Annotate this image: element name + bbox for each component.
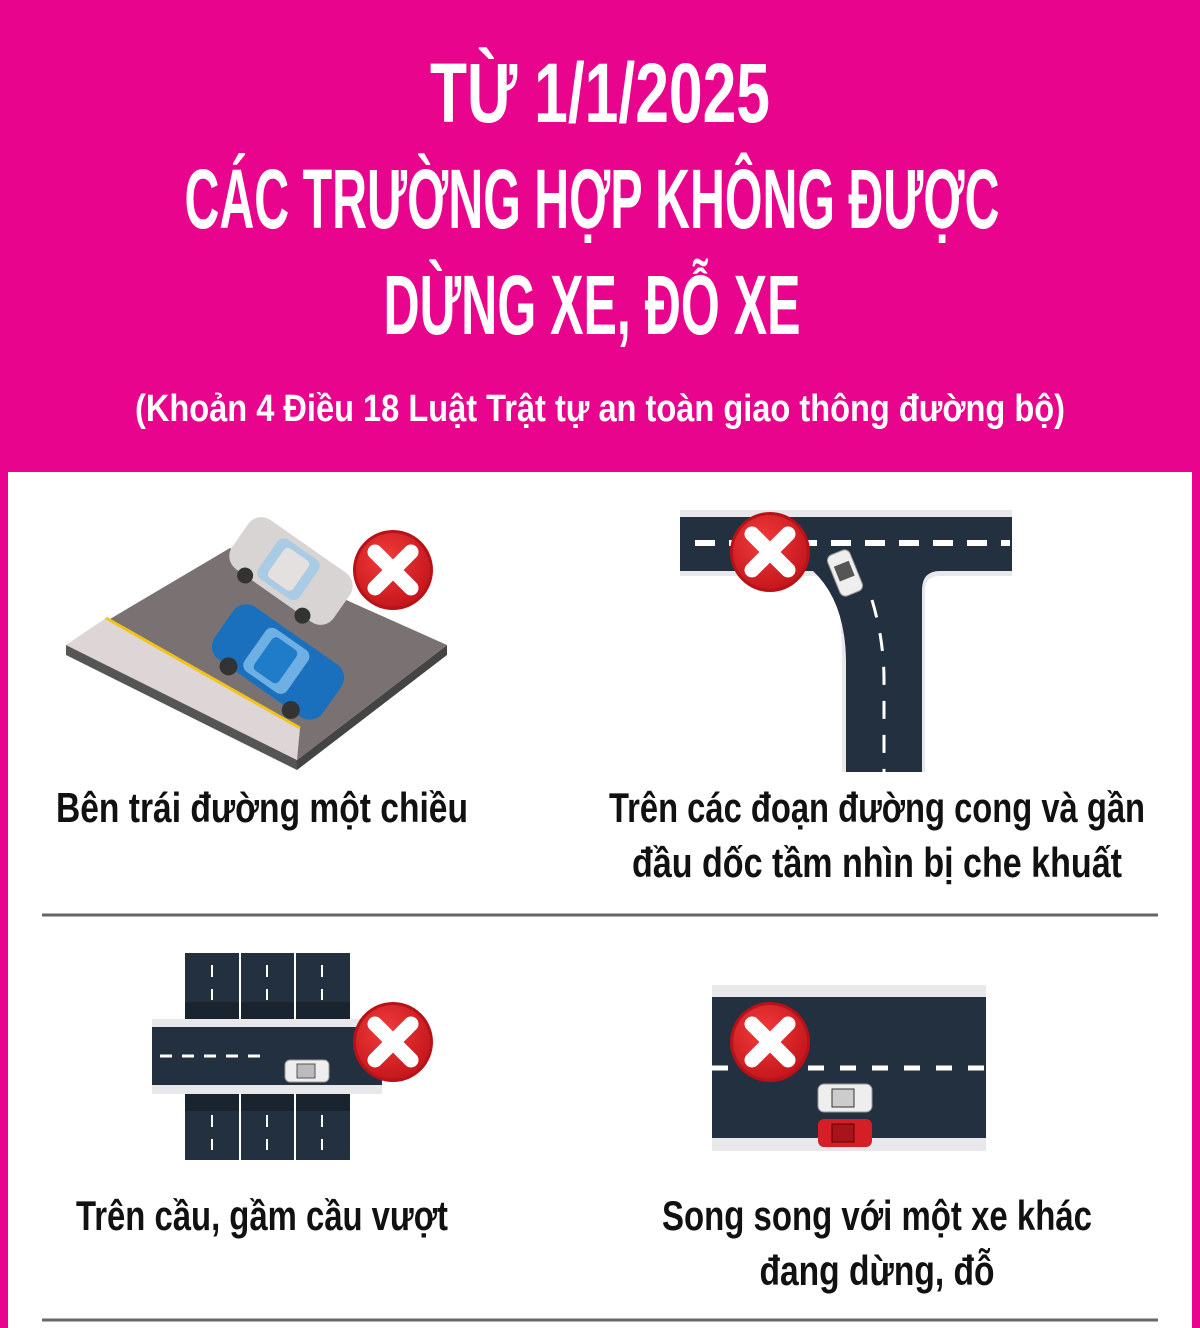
header background <box>0 0 1200 472</box>
caption: Song song với một xe khác <box>662 1192 1092 1239</box>
caption: Bên trái đường một chiều <box>56 784 468 831</box>
illustration: one-way road with cars <box>66 511 447 770</box>
title <box>184 46 1000 352</box>
car: blue <box>200 598 350 733</box>
illustration: overpass <box>152 953 433 1160</box>
panel: parallel parking <box>662 985 1092 1294</box>
panel: bridge <box>76 953 448 1239</box>
car <box>826 548 864 598</box>
illustration: road with parallel cars <box>712 985 986 1151</box>
car: red <box>818 1119 872 1147</box>
panel: curve road <box>609 510 1145 886</box>
content panel <box>8 472 1192 1328</box>
title: DỪNG XE, ĐỖ XE <box>384 258 800 352</box>
car <box>285 1060 329 1082</box>
car: white <box>818 1084 872 1112</box>
panel: parallel parking: đang dừng, đỗ <box>760 1246 994 1294</box>
subtitle: (Khoản 4 Điều 18 Luật Trật tự an toàn giao thông đường bộ) <box>135 388 1065 430</box>
illustration: T junction curve <box>680 510 1012 772</box>
panel: left one-way road <box>56 511 468 831</box>
car: grey <box>218 511 359 638</box>
caption: Trên cầu, gầm cầu vượt <box>76 1192 448 1239</box>
title: TỪ 1/1/2025 <box>430 46 770 140</box>
